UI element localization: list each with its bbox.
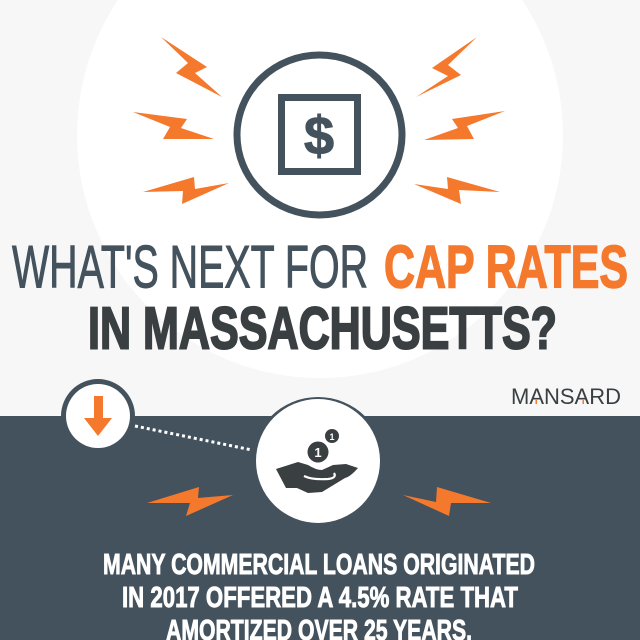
lightning bolts: left [133,37,229,204]
lightning bolt: lower right [403,487,491,516]
icon: dollar in circle: $ [304,106,334,166]
title [12,234,628,362]
lightning bolts: right [414,37,505,204]
panel: dark lower section [0,416,640,640]
icon: hand with coins: 1 [329,432,335,442]
icon: dollar in circle [237,55,402,215]
title: WHAT'S NEXT FOR [12,234,368,300]
body text [103,549,535,640]
logo: Mansard: MANSARD [511,384,621,409]
body text: IN 2017 OFFERED A 4.5% RATE THAT [122,582,518,614]
lightning bolt: lower left [147,487,233,516]
dotted connector [135,426,252,450]
icon: hand with coins [251,397,385,531]
icon: hand with coins: 1 [314,445,322,460]
icon: down arrow badge [61,379,135,453]
background white circle [77,0,563,378]
